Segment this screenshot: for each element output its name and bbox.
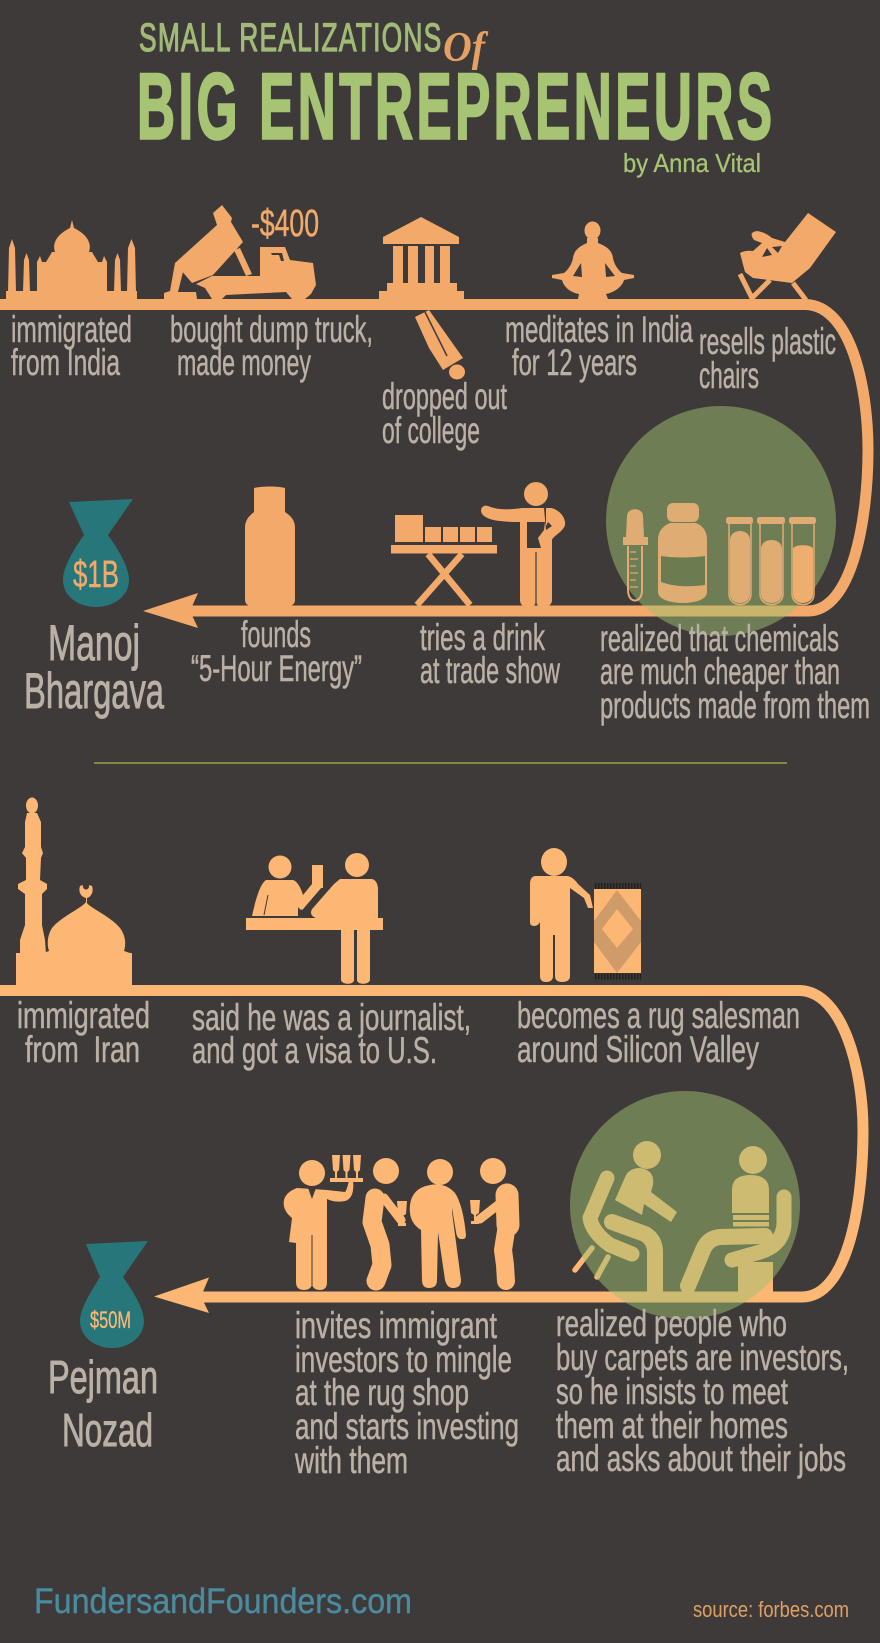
text: realized that chemicals (600, 618, 870, 726)
text: resells plastic chairs (699, 321, 836, 396)
callout: -$400: -$400 (251, 203, 319, 245)
icon: meditating person (552, 222, 634, 299)
text: bought dump truck (170, 309, 373, 383)
icon: dropper, jar and test tubes (623, 503, 816, 604)
text: bought dump truck: made money (177, 342, 311, 383)
icon: mosque (16, 798, 132, 986)
text: realized people who buy carpets (556, 1303, 849, 1479)
text: invites immigrant investors (294, 1305, 519, 1481)
money bag: $1B (63, 499, 133, 607)
panel: Manoj Bhargava timeline (0, 203, 870, 726)
title: SMALL REALIZATIONS (139, 16, 441, 60)
text: realized people who buy carpets: realized people who (556, 1303, 787, 1344)
text: resells plastic chairs: chairs (699, 355, 759, 396)
text: meditates in India (505, 309, 693, 383)
icon: two seated people (575, 1141, 784, 1292)
text: invites immigrant investors: and starts investing (295, 1406, 519, 1447)
text: founds 5-Hour Energy (191, 614, 362, 689)
text: tries a drink: at trade show (420, 650, 560, 691)
timeline arrow (0, 304, 868, 628)
text: founds 5-Hour Energy: “5-Hour Energy” (191, 648, 362, 689)
name: Manoj Bhargava: Bhargava (24, 663, 164, 719)
title: Of (443, 25, 489, 71)
text: tries a drink (420, 617, 560, 691)
text: said he was a journalist: said he was a journalist, (192, 997, 471, 1038)
name: Manoj Bhargava: Manoj (48, 615, 140, 671)
text: immigrated from Iran (17, 995, 150, 1070)
text: immigrated from Iran: from Iran (25, 1029, 140, 1070)
text: meditates in India: for 12 years (512, 342, 637, 383)
text: tries a drink: tries a drink (420, 617, 545, 658)
text: immigrated from India: from India (11, 342, 120, 383)
text: realized people who buy carpets: them at their homes (556, 1405, 788, 1446)
text: dropped out of college: dropped out (382, 376, 507, 417)
icon: dump truck (164, 205, 316, 299)
text: dropped out of college: of college (382, 410, 480, 451)
text: invites immigrant investors: at the rug shop (295, 1372, 469, 1413)
text: invites immigrant investors: invites immigrant (295, 1305, 498, 1346)
text: dropped out of college (382, 376, 507, 451)
text: invites immigrant investors: with them (294, 1440, 408, 1481)
highlight circle: realization (606, 406, 836, 636)
icon: upside-down dropout (415, 310, 465, 380)
text: founds 5-Hour Energy: founds (241, 614, 311, 655)
icon: bottle (245, 486, 295, 607)
money bag: $1B: $1B (73, 554, 119, 596)
name: Pejman Nozad: Nozad (62, 1404, 153, 1456)
text: meditates in India: meditates in India (505, 309, 693, 350)
text: invites immigrant investors: investors to mingle (295, 1339, 512, 1380)
text: becomes a rug salesman: around Silicon Valley (517, 1029, 759, 1070)
text: bought dump truck: bought dump truck, (170, 309, 373, 350)
icon: visa office (246, 853, 383, 984)
icon: college building (379, 217, 464, 299)
timeline arrow (0, 990, 863, 1313)
text: immigrated from India: immigrated (11, 309, 132, 350)
byline: by Anna Vital (623, 148, 761, 178)
icon: networking group (284, 1155, 508, 1290)
panel: Pejman Nozad timeline (0, 798, 863, 1481)
money bag: $50M (80, 1241, 148, 1348)
icon: Taj Mahal (6, 220, 137, 300)
text: immigrated from Iran: immigrated (17, 995, 150, 1036)
icon: rug salesman (530, 848, 641, 982)
text: becomes a rug salesman (517, 995, 800, 1070)
footer: source: source: forbes.com (693, 1597, 849, 1622)
footer: website: FundersandFounders.com (34, 1582, 412, 1621)
icon: person on plastic chair (740, 213, 836, 300)
title: BIG ENTREPRENEURS (137, 55, 772, 159)
text: said he was a journalist (192, 997, 471, 1071)
money bag: $50M: $50M (90, 1307, 131, 1334)
icon: person at trade show (481, 482, 565, 607)
name: Pejman Nozad (48, 1351, 158, 1456)
icon: trade show table (391, 515, 497, 605)
highlight circle: realization (570, 1091, 800, 1319)
name: Manoj Bhargava (24, 615, 164, 719)
text: said he was a journalist: and got a visa to U.S. (192, 1030, 437, 1071)
name: Pejman Nozad: Pejman (48, 1351, 158, 1403)
text: immigrated from India (11, 309, 132, 383)
